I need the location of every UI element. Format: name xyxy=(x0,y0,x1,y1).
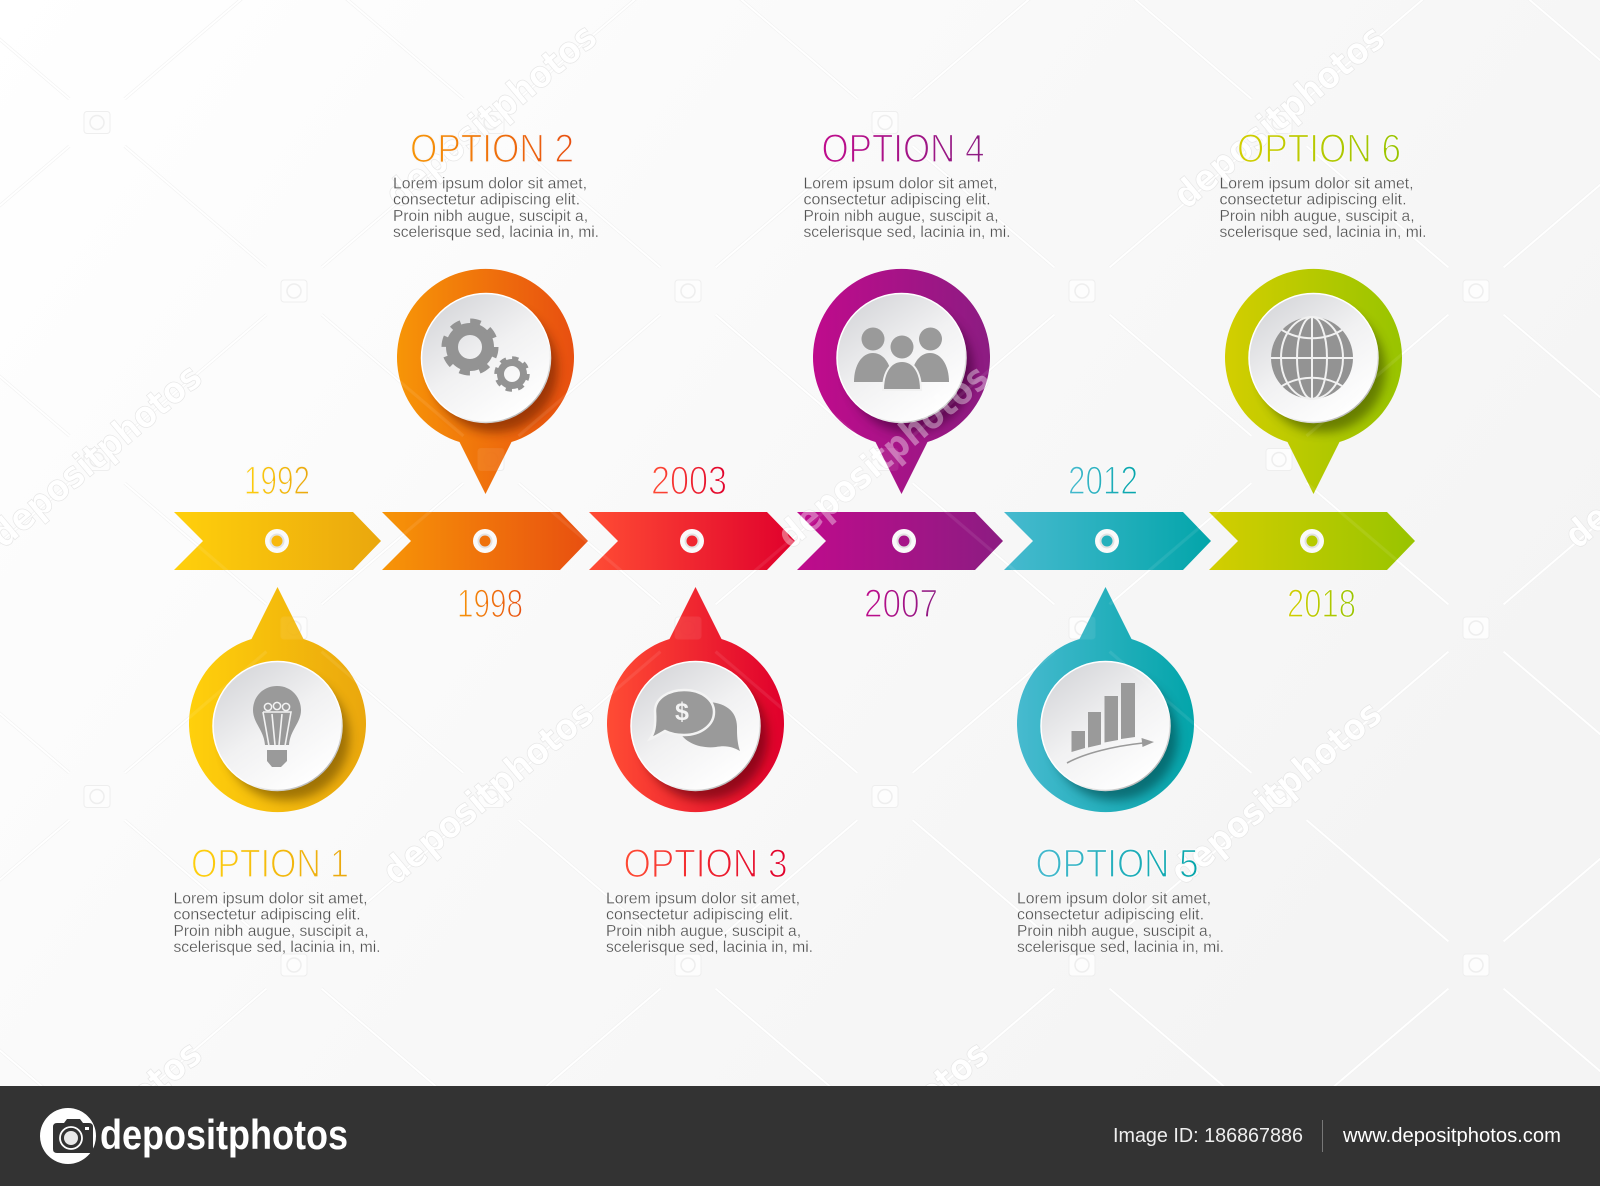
block: option 1: Lorem ipsum dolor sit amet, xyxy=(174,890,368,908)
block: option 3: OPTION 3 xyxy=(624,842,788,886)
block: option 4: Proin nibh augue, suscipit a, xyxy=(804,208,998,225)
logo wordmark: depositphotos xyxy=(100,1111,348,1158)
year labels: 2012 xyxy=(1068,459,1138,503)
block: option 1: scelerisque sed, lacinia in, mi. xyxy=(174,939,380,956)
arrow segment 6 xyxy=(1209,512,1415,570)
footer bar xyxy=(0,1086,1600,1186)
block: option 5: Proin nibh augue, suscipit a, xyxy=(1017,923,1212,940)
year labels: 1998 xyxy=(457,582,523,626)
year labels: 2003 xyxy=(651,459,727,503)
year labels xyxy=(244,459,1356,626)
pin 6: globe xyxy=(1225,269,1402,494)
pin 3: chat bubbles xyxy=(607,587,784,812)
block: option 6: Lorem ipsum dolor sit amet, xyxy=(1220,176,1414,192)
block: option 2: OPTION 2 xyxy=(410,127,574,171)
block: option 3: Proin nibh augue, suscipit a, xyxy=(606,923,801,940)
icon: globe xyxy=(1271,317,1353,399)
block: option 4: OPTION 4 xyxy=(822,127,984,171)
block: option 1 xyxy=(174,842,380,956)
timeline arrows xyxy=(174,512,1415,570)
block: option 3 xyxy=(606,842,813,956)
year labels: 2018 xyxy=(1287,582,1356,626)
watermark wordmarks: depositphotos xyxy=(1162,692,1390,893)
year labels: 1992 xyxy=(244,459,310,503)
website url: www.depositphotos.com xyxy=(1342,1125,1561,1147)
block: option 4: consectetur adipiscing elit. xyxy=(804,192,990,208)
block: option 6: Proin nibh augue, suscipit a, xyxy=(1220,208,1414,225)
block: option 6: OPTION 6 xyxy=(1237,127,1401,171)
image id: Image ID: 186867886 xyxy=(1113,1125,1303,1147)
block: option 6: scelerisque sed, lacinia in, mi. xyxy=(1220,224,1426,241)
block: option 5: OPTION 5 xyxy=(1036,842,1198,886)
block: option 5: Lorem ipsum dolor sit amet, xyxy=(1017,890,1211,908)
block: option 5: consectetur adipiscing elit. xyxy=(1017,906,1204,924)
block: option 6 xyxy=(1220,127,1426,241)
block: option 1: consectetur adipiscing elit. xyxy=(174,906,360,924)
block: option 1: Proin nibh augue, suscipit a, xyxy=(174,923,368,940)
icon: people xyxy=(854,328,949,390)
block: option 5: scelerisque sed, lacinia in, mi. xyxy=(1017,939,1224,956)
pin 4: people xyxy=(813,269,990,494)
block: option 4 xyxy=(804,127,1010,241)
year labels: 2007 xyxy=(864,582,938,626)
pin 5: growth chart xyxy=(1017,587,1194,812)
block: option 2: Proin nibh augue, suscipit a, xyxy=(393,208,588,225)
pin 1: light bulb xyxy=(189,587,366,812)
block: option 4: Lorem ipsum dolor sit amet, xyxy=(804,176,998,192)
icon: growth chart xyxy=(1067,683,1154,763)
block: option 3: consectetur adipiscing elit. xyxy=(606,906,793,924)
icon: gears xyxy=(446,322,527,389)
arrow segment 4 xyxy=(797,512,1003,570)
arrow segment 3 xyxy=(589,512,795,570)
block: option 2: scelerisque sed, lacinia in, mi. xyxy=(393,224,599,241)
icon: chat bubbles with dollar xyxy=(650,690,740,751)
pin 2: gears xyxy=(397,269,574,494)
icon: camera logo xyxy=(40,1108,96,1164)
block: option 4: scelerisque sed, lacinia in, mi. xyxy=(804,224,1010,241)
arrow segment 1 xyxy=(174,512,381,570)
block: option 2: Lorem ipsum dolor sit amet, xyxy=(393,176,587,192)
block: option 1: OPTION 1 xyxy=(191,842,349,886)
block: option 3: scelerisque sed, lacinia in, mi. xyxy=(606,939,813,956)
block: option 3: Lorem ipsum dolor sit amet, xyxy=(606,890,800,908)
icon: light bulb xyxy=(253,686,301,767)
block: option 5 xyxy=(1017,842,1224,956)
text: depositphotos xyxy=(769,356,997,557)
watermark wordmarks: depositphotos xyxy=(374,692,602,893)
arrow segment 5 xyxy=(1004,512,1211,570)
block: option 2 xyxy=(393,127,599,241)
block: option 2: consectetur adipiscing elit. xyxy=(393,192,580,208)
block: option 6: consectetur adipiscing elit. xyxy=(1220,192,1406,208)
arrow segment 2 xyxy=(382,512,588,570)
icon: chat bubbles with dollar: $ xyxy=(675,698,689,726)
watermark wordmarks: depositphotos xyxy=(769,356,997,557)
